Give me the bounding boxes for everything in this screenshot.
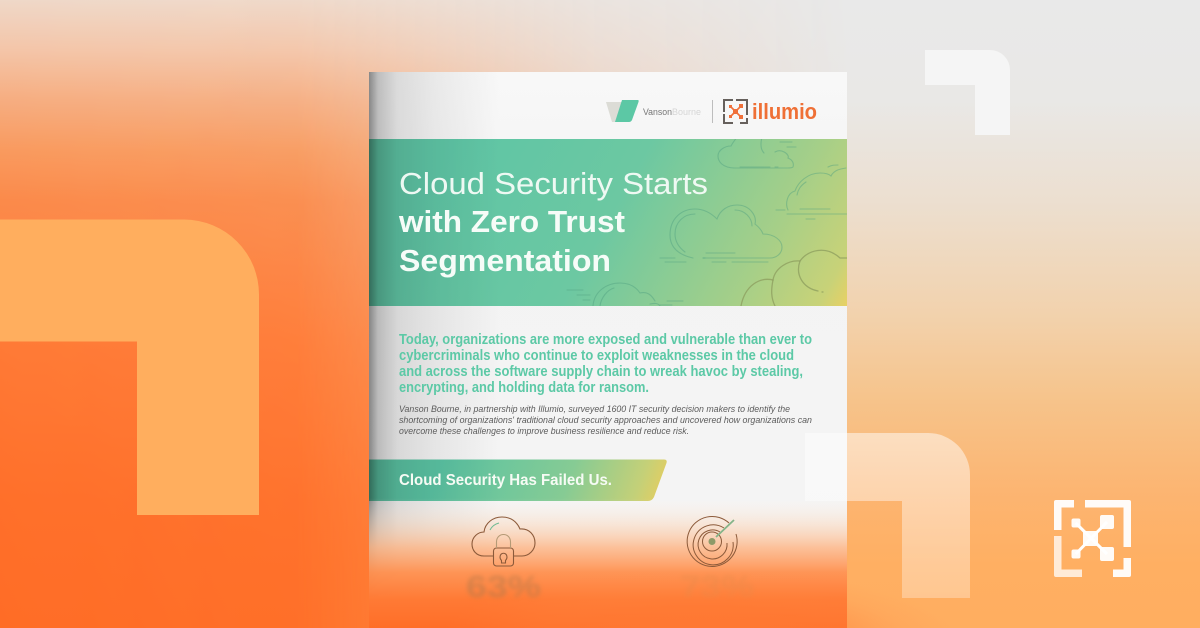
survey description: Vanson Bourne, in partnership with Illumio, surveyed 1600 IT security decision makers to identify the [399, 404, 790, 415]
document preview [369, 72, 847, 628]
title banner [369, 137, 847, 306]
statistic: 63 percent: 63% [466, 569, 541, 604]
logo: illumio: illumio [752, 99, 817, 124]
cloud line art [567, 137, 847, 306]
bottom orange glow [440, 570, 960, 628]
title text: Cloud Security Starts [399, 166, 708, 201]
section banner [369, 460, 667, 501]
statistic: second percent: 73% [680, 569, 754, 604]
header logos [606, 99, 817, 124]
intro paragraph: and across the software supply chain to wreak havoc by stealing, [399, 363, 803, 380]
decorative corner shape: bottom right translucent [805, 433, 970, 598]
intro paragraph [399, 331, 812, 396]
logo: illumio [724, 99, 817, 124]
logo brackets [1054, 500, 1074, 530]
section banner heading: Cloud Security Has Failed Us. [399, 472, 612, 489]
icon: cloud with lock [472, 517, 535, 566]
survey description [399, 404, 812, 437]
survey description: shortcoming of organizations' traditional cloud security approaches and uncovered how organizations can [399, 415, 812, 426]
intro paragraph: cybercriminals who continue to exploit weaknesses in the cloud [399, 347, 794, 364]
logo: Vanson Bourne: Bourne [672, 107, 701, 117]
intro paragraph: encrypting, and holding data for ransom. [399, 379, 649, 396]
survey description: overcome these challenges to improve business resilience and reduce risk. [399, 426, 689, 437]
logo: Vanson Bourne [606, 100, 701, 122]
logo nodes [1076, 522, 1107, 554]
intro paragraph: Today, organizations are more exposed and vulnerable than ever to [399, 331, 812, 348]
icon: target [687, 516, 737, 566]
title text [398, 166, 708, 278]
logo: Vanson Bourne: Vanson [643, 107, 672, 117]
title text: with Zero Trust [398, 204, 625, 239]
page edge shading [369, 72, 499, 628]
logo: illumio mark [1054, 500, 1131, 577]
title text: Segmentation [399, 243, 611, 278]
document page [369, 72, 847, 628]
decorative corner shape: left orange [0, 220, 259, 515]
bottom fade [369, 498, 847, 628]
decorative corner shape: top right [925, 50, 1010, 135]
